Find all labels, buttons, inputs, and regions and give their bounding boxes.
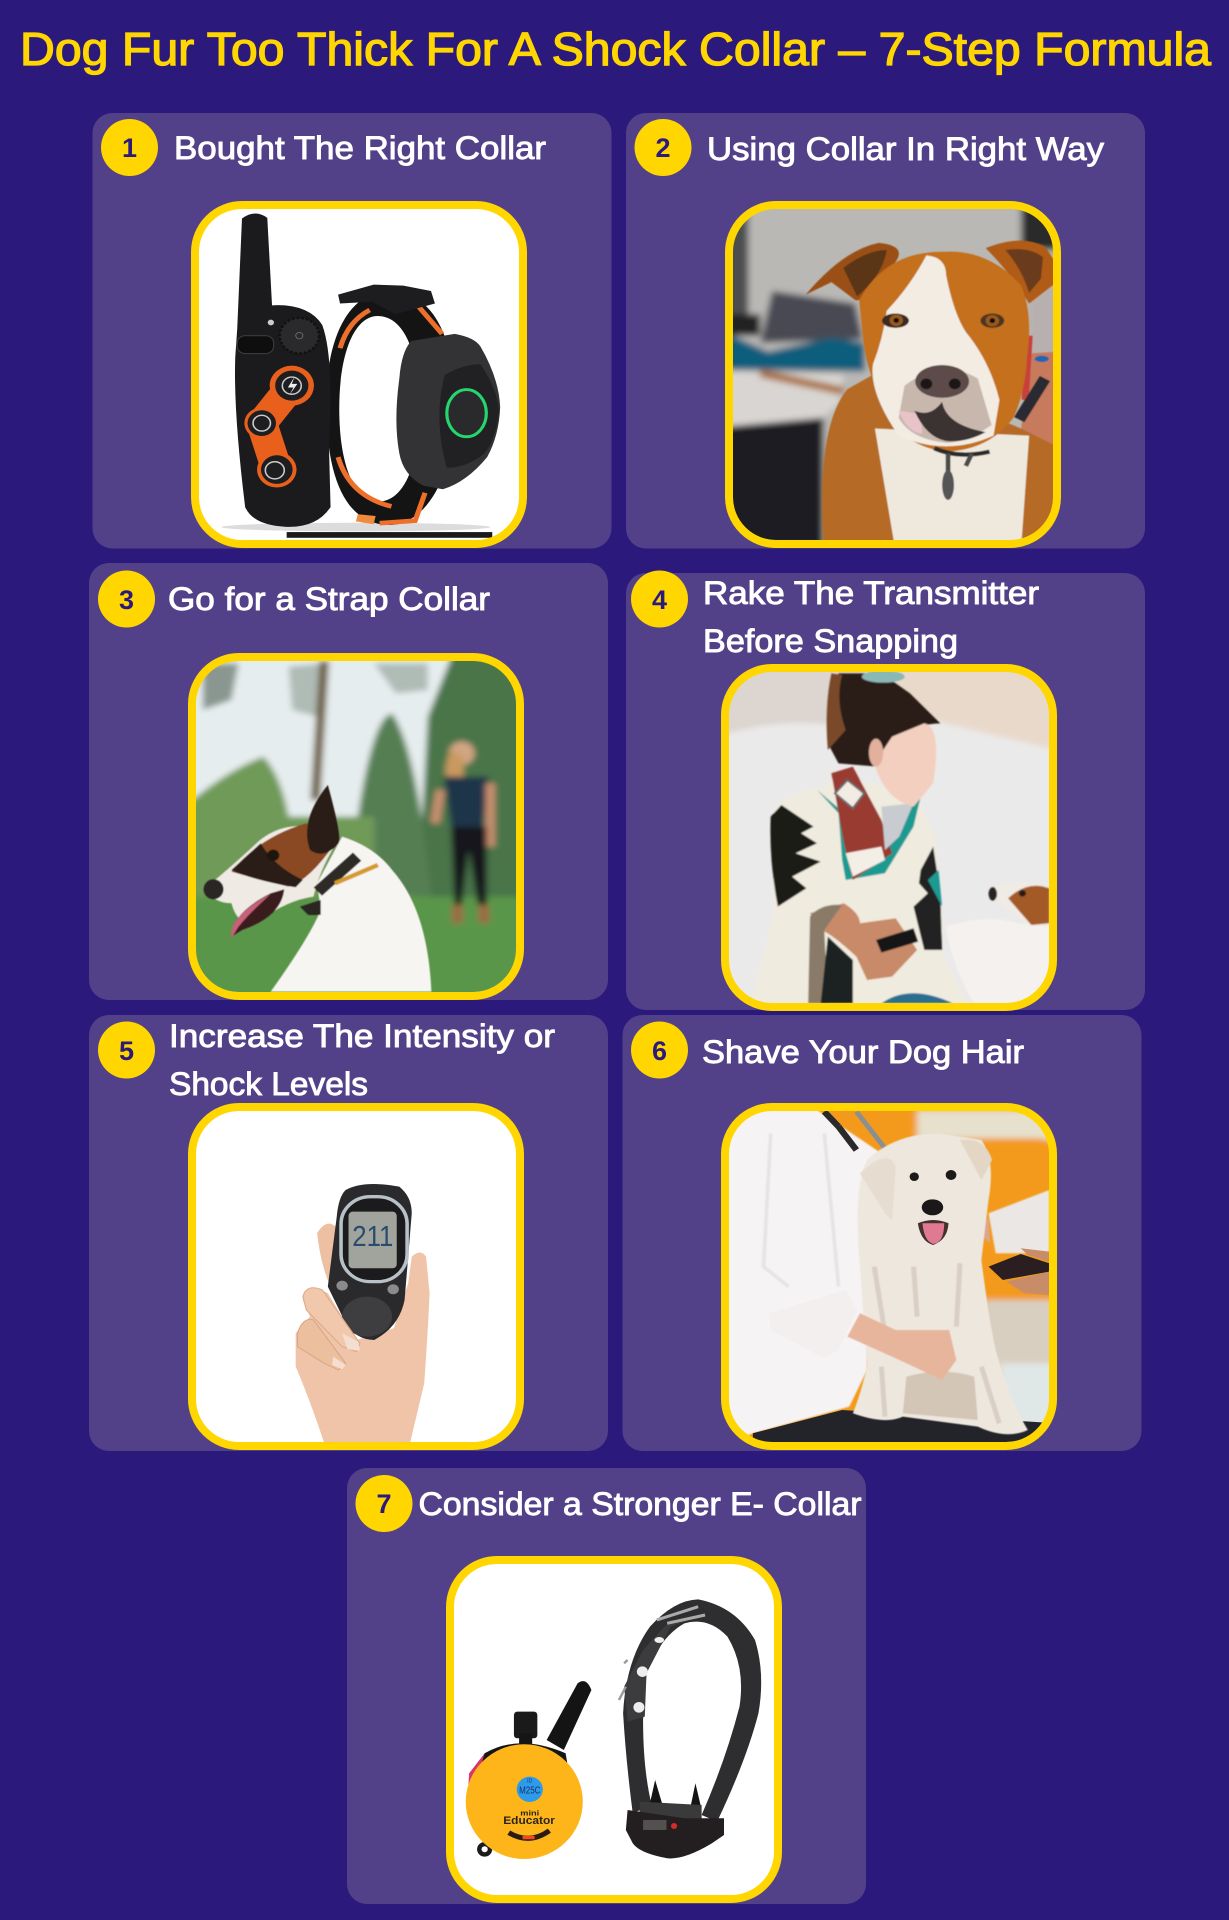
photo: hand holding digital meter: 211	[352, 1221, 393, 1253]
step number badge 1	[101, 119, 158, 176]
panel background 1	[92, 113, 612, 548]
photo: vet holding white dog	[721, 1103, 1056, 1450]
photo: remote transmitter and collar	[190, 200, 530, 550]
photo: brown and white dog	[721, 200, 1061, 550]
step heading 4: Before Snapping	[703, 623, 958, 659]
step number badge 3: 3	[119, 585, 134, 615]
step heading 5: Shock Levels	[169, 1066, 368, 1102]
panel background 7	[347, 1468, 866, 1904]
step number badge 2: 2	[655, 133, 671, 163]
photo: yellow Educator remote and collar: ID	[527, 1778, 533, 1784]
step heading 4: Rake The Transmitter	[703, 575, 1039, 611]
step heading 5	[169, 1018, 555, 1102]
photo: yellow Educator remote and collar: M25C	[519, 1785, 540, 1796]
panel: step 4	[626, 570, 1145, 1010]
panel background 2	[626, 113, 1145, 548]
step heading 2: Using Collar In Right Way	[707, 131, 1104, 167]
panel: step 5	[89, 1015, 608, 1451]
step heading 5: Increase The Intensity or	[169, 1018, 555, 1054]
title: Dog Fur Too Thick For A Shock Collar – 7-Step Formula	[20, 23, 1211, 75]
step number badge 5	[98, 1022, 155, 1078]
photo: woman holding transmitter with dog	[721, 663, 1056, 1010]
step number badge 6: 6	[652, 1036, 667, 1066]
panel background 4	[626, 573, 1145, 1010]
step number badge 5: 5	[119, 1036, 134, 1066]
step heading 6: Shave Your Dog Hair	[702, 1034, 1024, 1070]
step heading 1: Bought The Right Collar	[174, 130, 546, 166]
step number badge 3	[98, 570, 155, 628]
panel background 6	[622, 1015, 1142, 1451]
step heading 7: Consider a Stronger E- Collar	[418, 1486, 862, 1522]
step number badge 7: 7	[376, 1489, 392, 1519]
photo: yellow Educator remote and collar: Educator	[503, 1815, 556, 1827]
step number badge 4	[631, 570, 688, 628]
photo: yellow Educator remote and collar	[450, 1560, 778, 1899]
step heading 3: Go for a Strap Collar	[168, 581, 490, 617]
panel: step 6	[622, 1015, 1142, 1451]
panel: step 1	[92, 113, 612, 550]
step number badge 6	[631, 1022, 688, 1078]
step number badge 4: 4	[652, 585, 667, 615]
panel background 5	[89, 1015, 608, 1451]
step number badge 2	[634, 119, 692, 176]
panel: step 3	[89, 563, 608, 1000]
photo: yellow Educator remote and collar: mini	[520, 1808, 539, 1817]
panel background 3	[89, 563, 608, 1000]
panel: step 7	[347, 1468, 866, 1904]
photo: terrier in park with owner	[189, 653, 524, 1000]
step heading 4	[703, 575, 1039, 659]
panel: step 2	[626, 113, 1145, 550]
step number badge 7	[356, 1475, 412, 1532]
step number badge 1: 1	[122, 133, 137, 163]
photo: hand holding digital meter	[192, 1107, 520, 1446]
